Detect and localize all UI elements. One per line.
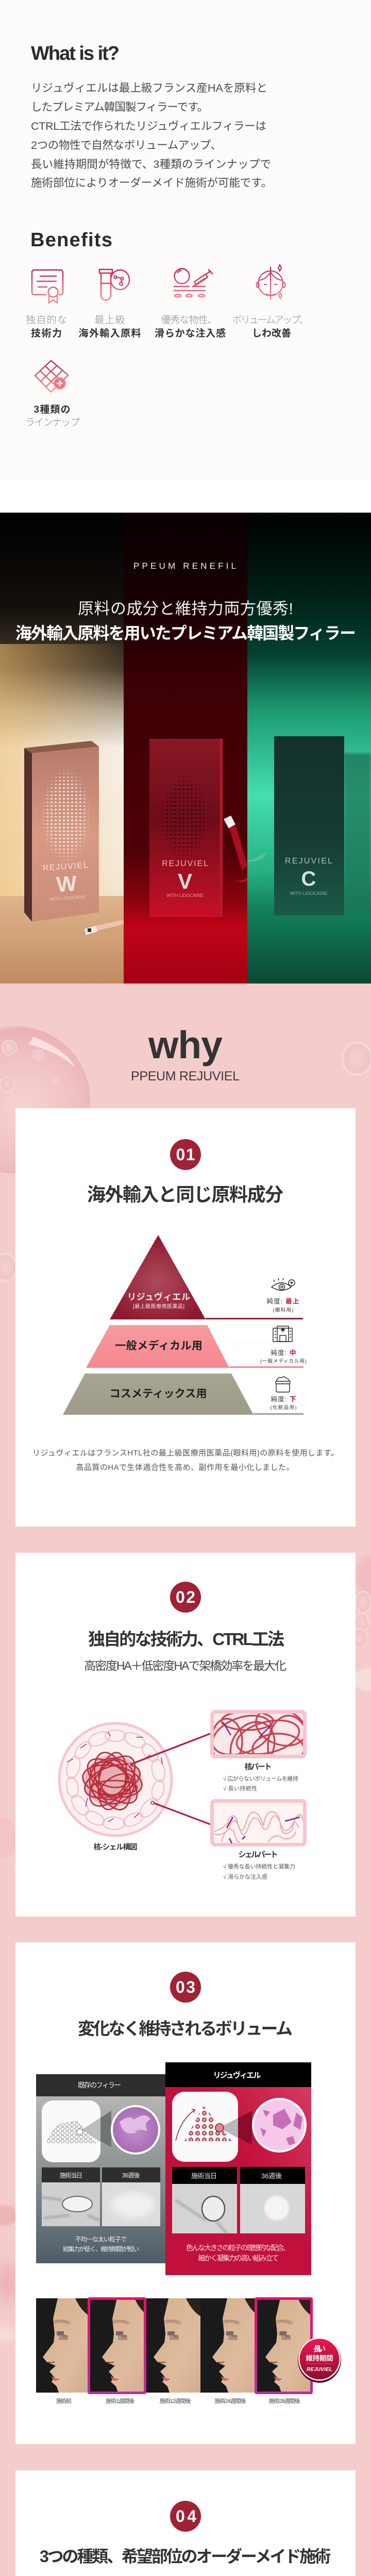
highlight: 28 week frame [256, 2299, 311, 2393]
heading: 02 title: 独自的な技術力、CTRL工法 [88, 1630, 284, 1649]
text block: conventional caption: 結集力が低く、維持期間が短い [63, 2245, 139, 2252]
panel: 04 three types [15, 2470, 356, 2576]
decoration: pink background [0, 1929, 371, 2576]
pyramid tier: rejuviel: [最上級医療用医薬品] [133, 1303, 184, 1310]
text block: benefit labels: 技術力 [31, 327, 62, 339]
diagram: conventional particles [42, 2100, 159, 2162]
pyramid tier: cosmetics: コスメティックス用 [109, 1388, 207, 1400]
text block: strip captions [56, 2397, 300, 2404]
text block: conventional caption [63, 2235, 139, 2252]
text block: product description: リジュヴィエルは最上級フランス産HAを原料と [31, 82, 267, 94]
pyramid tier: general medical: 一般メディカル用 [115, 1340, 203, 1352]
heading: why: why [148, 1023, 223, 1066]
text block: purity labels: (一般メディカル用) [260, 1358, 307, 1364]
text block: core part: √ 長い持続性 [223, 1785, 257, 1792]
text block: product description: 施術部位によりオーダーメイド施術が可能です。 [31, 177, 272, 189]
heading: ppeum rejuviel: PPEUM REJUVIEL [131, 1069, 240, 1083]
text block: product description: CTRL工法で作られたリジュヴィエルフィラーは [31, 120, 266, 132]
text block: shell part: √ 優秀な長い持続性と凝集力 [223, 1863, 295, 1870]
text block: strip captions: 施術12週間後 [160, 2397, 191, 2404]
panel: hero product lineup [0, 513, 371, 984]
panel: what is it, benefits and hero [0, 43, 371, 984]
icon: lineup grid [35, 361, 68, 392]
panel: rejuviel comparison [165, 2062, 311, 2275]
icon: eye [272, 1278, 295, 1290]
photo: conventional 36 weeks [102, 2167, 160, 2226]
highlight: one week frame [89, 2299, 145, 2393]
badge: 03 [170, 1972, 201, 2003]
badge: long duration: REJUVIEL [307, 2367, 332, 2372]
badge: 04 [170, 2501, 201, 2532]
photo: rejuviel day of treatment: 施術当日 [191, 2172, 217, 2180]
icon: certificate [32, 270, 63, 303]
icon: test tube [99, 269, 129, 300]
text: conventional header: 既存のフィラー [78, 2081, 121, 2089]
heading: 01 title: 海外輸入と同じ原料成分 [87, 1184, 283, 1205]
heading: benefits: Benefits [30, 229, 112, 251]
diagram: shell close-up [212, 1801, 305, 1844]
text block: shell part: √ 滑らかな注入感 [223, 1873, 267, 1880]
text block: core part: 核パート [244, 1762, 272, 1771]
panel: 03 lasting volume [15, 1942, 356, 2444]
icon: syringe on skin [174, 269, 213, 297]
heading: 04 title: 3つの種類、希望部位のオーダーメイド施術 [40, 2547, 331, 2566]
pyramid tier: rejuviel: リジュヴィエル [127, 1292, 190, 1302]
photo: V product column: V [178, 869, 192, 893]
diagram: rejuviel particles [172, 2092, 306, 2162]
text block: product description [31, 82, 272, 189]
icon: hospital [273, 1326, 292, 1342]
heading: hero brand: PPEUM RENEFIL [133, 561, 236, 571]
photo: C product column: WITH LIDOCAINE [290, 891, 328, 896]
badge: long duration [298, 2337, 341, 2383]
text block: product description: 長い維持期間が特徴で、3種類のラインナップで [31, 158, 271, 171]
text block: conventional caption: 不均一な太い粒子で [75, 2235, 127, 2243]
text block: benefit labels: しわ改善 [252, 328, 291, 339]
panel: why section with cards 01 and 02 [0, 984, 371, 1929]
text block: core part: √ 広がらないボリュームを維持 [223, 1775, 298, 1782]
text block: product description: したプレミアム韓国製フィラーです。 [31, 101, 208, 113]
chart: purity pyramid [63, 1235, 307, 1415]
text block: shell part [223, 1851, 295, 1880]
photo: rejuviel 36 weeks [240, 2167, 305, 2233]
panel: 02 CTRL technology [15, 1553, 356, 1917]
text block: purity labels: 純度: 最上 [267, 1297, 299, 1305]
panel: why section with cards 03 and 04 [0, 1929, 371, 2576]
panel: why section background [0, 984, 371, 1929]
text block: shell part: シェルパート [238, 1851, 278, 1859]
text block: core-shell label: 核-シェル構図 [94, 1842, 137, 1852]
photo: V product column: REJUVIEL [162, 859, 208, 868]
text block: purity labels: (化粧品用) [270, 1404, 297, 1411]
badge: 04: 04 [176, 2507, 196, 2526]
text block: benefit labels: 海外輸入原料 [78, 328, 141, 339]
photo: conventional day of treatment [42, 2167, 100, 2226]
photo: rejuviel day of treatment [172, 2167, 237, 2233]
text block: strip captions: 施術24週間後 [214, 2397, 246, 2404]
text block: product description: 2つの物性で自然なボリュームアップ、 [31, 139, 222, 151]
panel: 01 raw material [15, 1108, 356, 1527]
diagram: core-shell sphere [59, 1723, 172, 1836]
photo: W product column: REJUVIEL [42, 861, 88, 873]
text block: benefit labels: 最上級 [95, 314, 125, 326]
photo: W product column: W [56, 871, 78, 896]
panel: what is it and benefits [0, 0, 371, 480]
text block: rejuviel caption: 色んな大きさの粒子の理想的な配合、 [186, 2244, 290, 2252]
arrow: shell connector [154, 1803, 210, 1824]
panel: conventional filler [36, 2074, 165, 2263]
text block: benefit labels: 3種類の [34, 404, 70, 415]
text block: strip captions: 施術28週間後 [269, 2397, 300, 2404]
text block: rejuviel caption: 細かく凝集力の高い組み立て [198, 2254, 279, 2262]
text block: benefit labels: 優秀な物性、 [161, 314, 217, 326]
text block: 01 caption [32, 1449, 339, 1472]
text: rejuviel header: リジュヴィエル [213, 2071, 261, 2080]
text block: strip captions: 施術前 [56, 2397, 72, 2404]
text block: benefit labels: 独自的な [26, 314, 67, 326]
text block: purity labels: 純度: 下 [271, 1395, 296, 1403]
arrow: core connector [130, 1734, 210, 1765]
badge: 02: 02 [176, 1588, 195, 1606]
photo: V product column: WITH LIDOCAINE [166, 893, 204, 898]
photo: W product column: WITH LIDOCAINE [49, 894, 86, 902]
text block: strip captions: 施術1週間後 [106, 2397, 134, 2404]
icon: cream jar [276, 1376, 290, 1392]
text block: 01 caption: 高品質のHAで生体適合性を高め、副作用を最小化しました。 [76, 1463, 294, 1472]
icon: face split [257, 265, 285, 300]
heading: hero title: 海外輸入原料を用いたプレミアム韓国製フィラー [15, 624, 356, 642]
photo: conventional day of treatment: 施術当日 [60, 2171, 82, 2179]
photo: W product column [0, 513, 124, 984]
pyramid tier: cosmetics [63, 1374, 254, 1415]
badge: 01 [170, 1139, 201, 1170]
badge: 02 [170, 1582, 201, 1613]
photo: C product column: C [301, 868, 316, 890]
text block: rejuviel caption [186, 2244, 290, 2262]
photo strip: before and after profiles [36, 2298, 341, 2393]
heading: hero subtitle: 原料の成分と維持力両方優秀! [78, 600, 293, 618]
heading: what is it: What is it? [31, 43, 120, 64]
photo: V product column [124, 513, 247, 984]
text block: purity labels: (眼科用) [273, 1307, 294, 1313]
pyramid tier: rejuviel [110, 1235, 206, 1319]
text block: benefit labels: 滑らかな注入感 [155, 327, 226, 339]
text block: 02 subtitle: 高密度HA＋低密度HAで架橋効率を最大化 [84, 1659, 286, 1672]
photo: conventional 36 weeks: 36週後 [122, 2172, 140, 2179]
heading: 03 title: 変化なく維持されるボリューム [78, 2019, 293, 2038]
badge: 01: 01 [176, 1145, 195, 1164]
photo: rejuviel 36 weeks: 36週後 [261, 2172, 282, 2180]
text block: benefit labels: ラインナップ [25, 417, 80, 428]
pyramid tier: general medical [86, 1325, 229, 1368]
badge: long duration: 維持期間 [306, 2354, 333, 2362]
text block: core part [223, 1762, 298, 1792]
photo: C product column [247, 513, 371, 984]
text block: 01 caption: リジュヴィエルはフランスHTL社の最上級医療用医薬品(眼科用)の原料を使用します。 [32, 1449, 339, 1458]
badge: 03: 03 [176, 1978, 195, 1996]
photo: C product column: REJUVIEL [285, 857, 332, 866]
text block: benefit labels: ボリュームアップ、 [232, 314, 309, 326]
text block: benefit labels [25, 314, 309, 428]
text block: purity labels: 純度: 中 [271, 1349, 296, 1357]
badge: long duration: 長い [313, 2345, 326, 2353]
text block: purity labels [260, 1297, 307, 1411]
diagram: core close-up [210, 1710, 307, 1758]
